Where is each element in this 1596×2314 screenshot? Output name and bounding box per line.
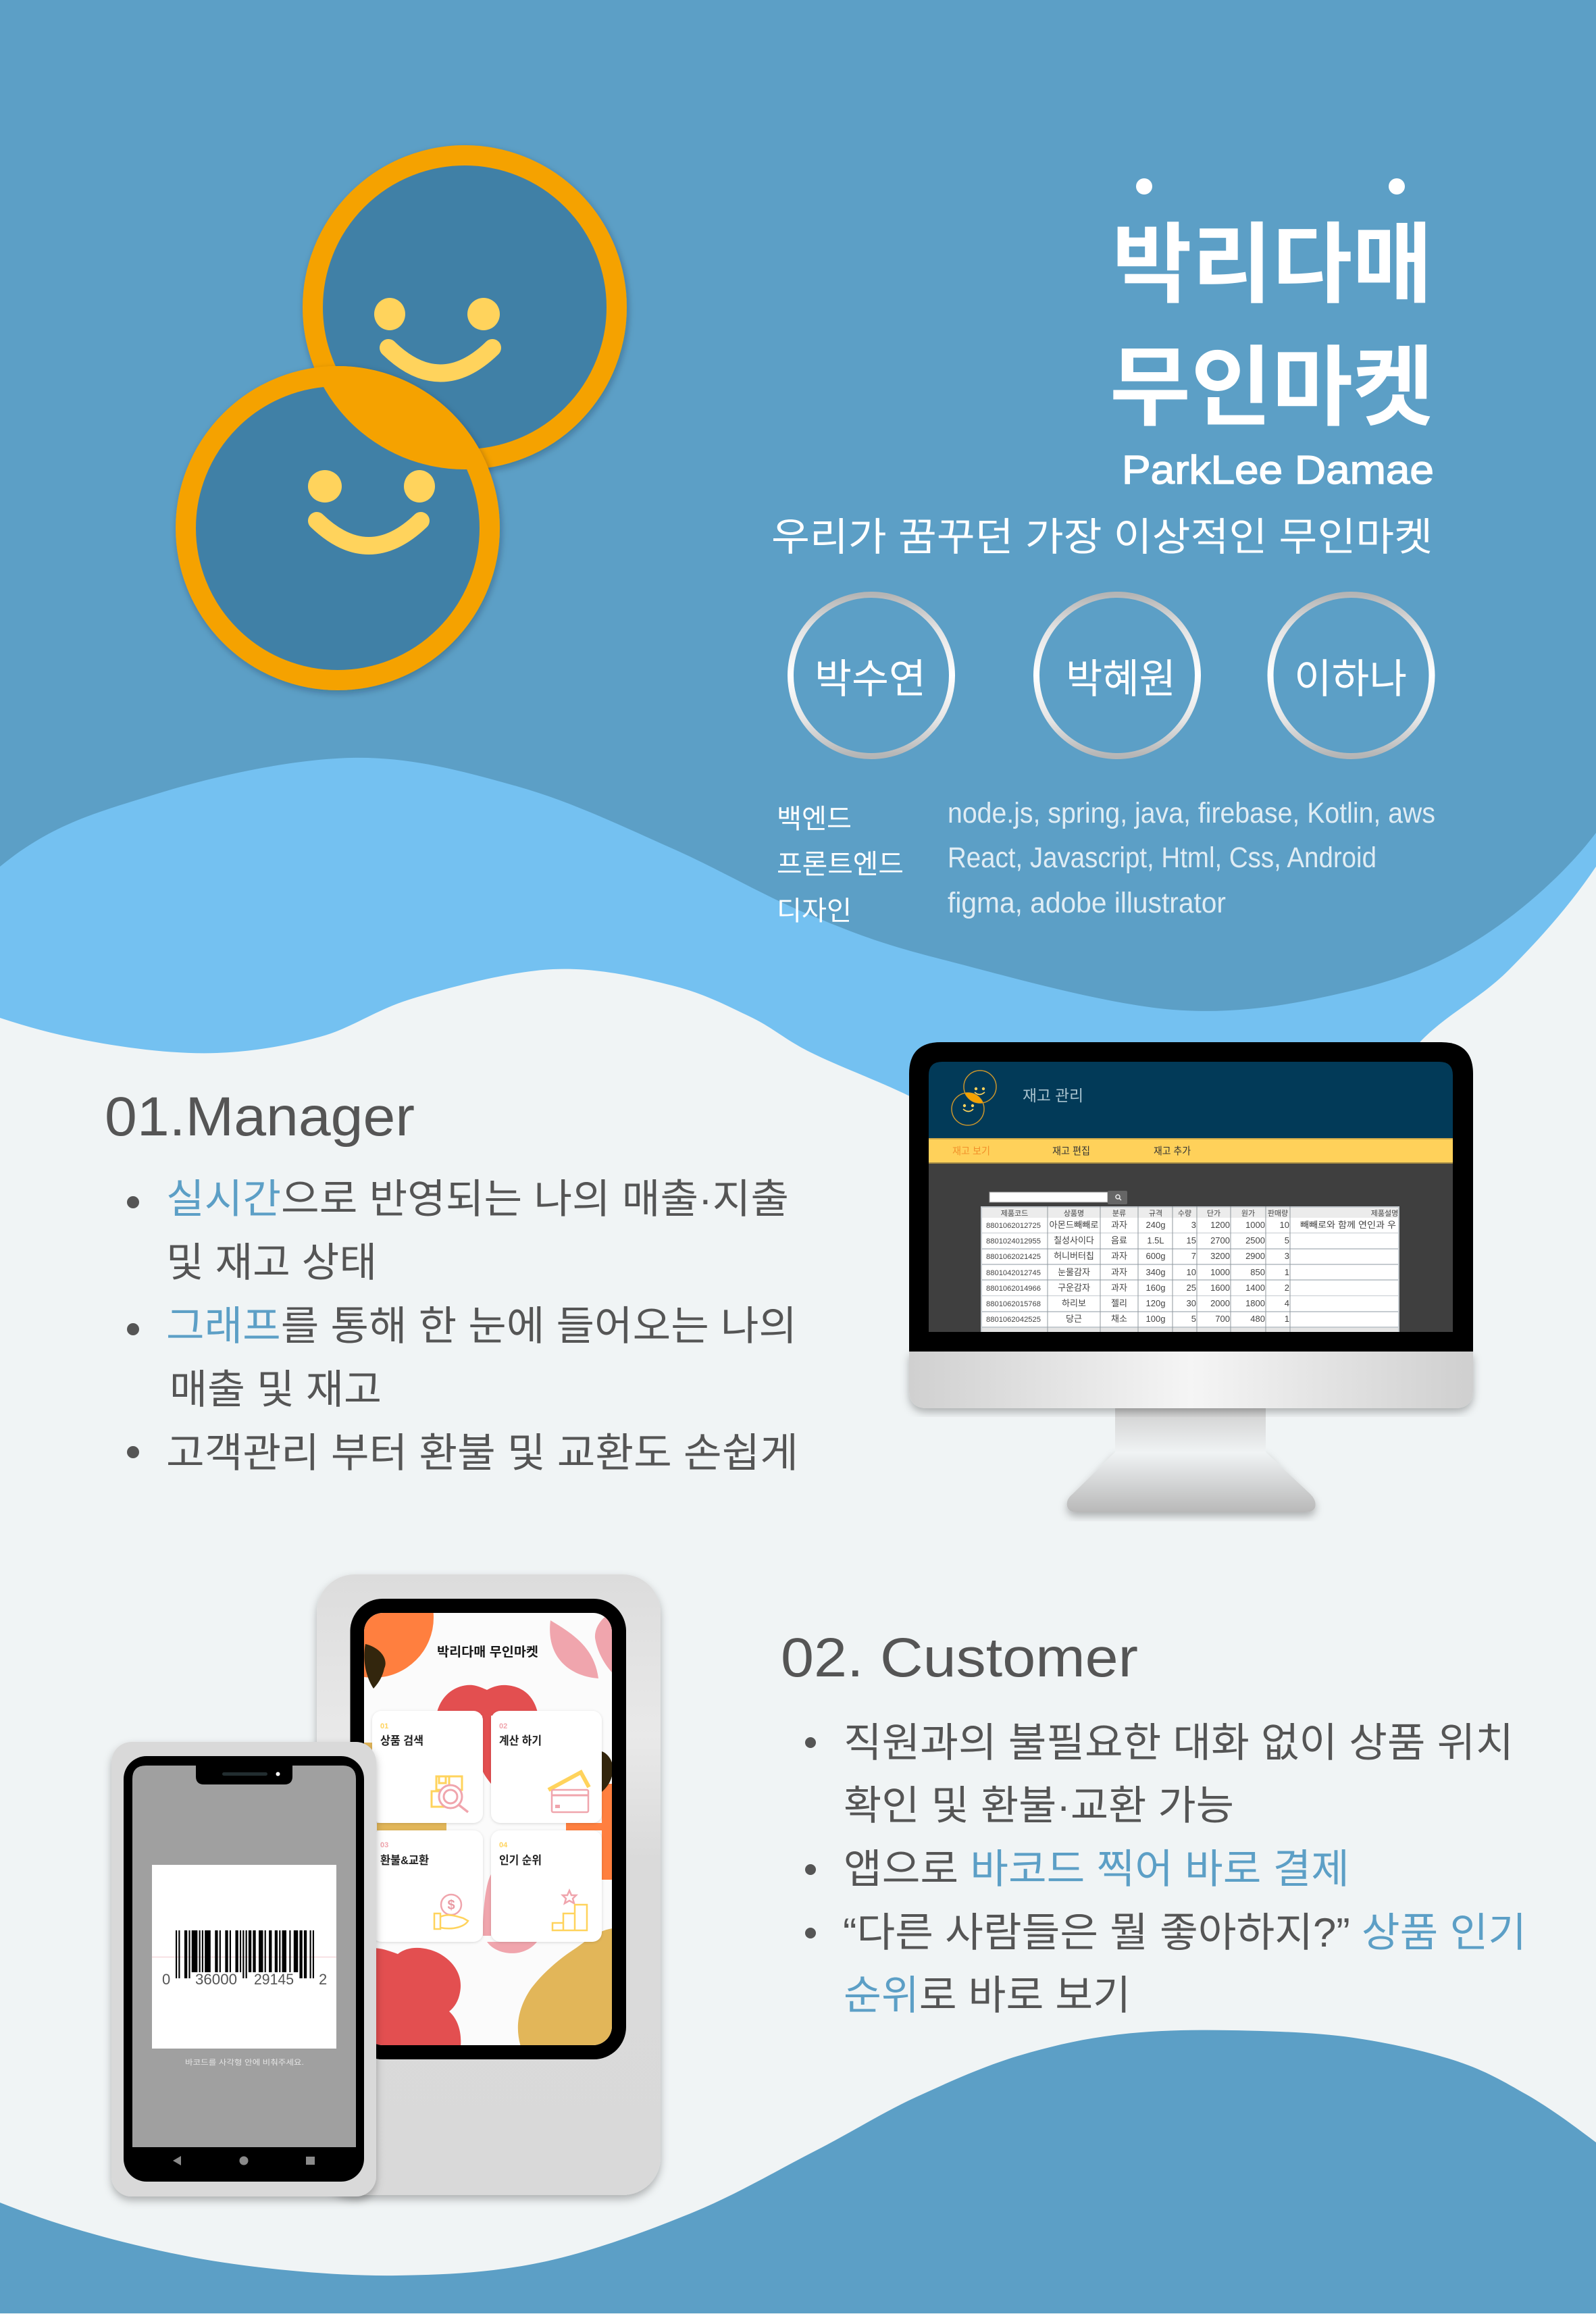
screen decoration: yellow bottom blob (518, 1928, 613, 2047)
screen: inventory table: 8801062015768 (986, 1300, 1041, 1308)
screen: inventory table: 700 (1215, 1314, 1230, 1324)
title: 박리다매 무인마켓 (1110, 178, 1434, 437)
screen: inventory table: 160g (1146, 1283, 1165, 1293)
screen: inventory table: 2 (1285, 1283, 1289, 1293)
monitor: screen inventory app (929, 1062, 1453, 1332)
screen: inventory table: 과자 (1111, 1283, 1127, 1293)
card: 계산 하기: 02 (499, 1722, 507, 1730)
screen: inventory table: 8801062012725 (986, 1222, 1041, 1230)
member: 박혜원: 박혜원 (1066, 657, 1176, 702)
title: 박리다매 무인마켓: 박리다매 (1112, 215, 1433, 314)
card: 상품 검색 (372, 1711, 483, 1823)
logo: orange overlap lens (324, 366, 479, 469)
screen: body (929, 1164, 1453, 1332)
screen: yellow nav bar: 재고 편집 (1052, 1146, 1090, 1157)
monitor mockup (909, 1042, 1473, 1512)
logo: lower smiley (186, 376, 490, 680)
screen: inventory table: 8801024012955 (986, 1237, 1041, 1245)
phone mockup: barcode scanner (111, 1742, 376, 2196)
customer bullet list: “다른 사람들은 뭘 좋아하지?” 상품 인기 (843, 1910, 1526, 1955)
manager bullet list: 고객관리 부터 환불 및 교환도 손쉽게 (166, 1431, 798, 1476)
monitor: stand neck (1115, 1408, 1266, 1453)
barcode digits: 36000 (195, 1971, 237, 1988)
customer bullet list: 순위로 바로 보기 (844, 1973, 1131, 2018)
screen: inventory table: 3 (1191, 1220, 1196, 1230)
heading: 02. Customer: 02. Customer (781, 1627, 1138, 1689)
role labels: 프론트엔드 (777, 850, 904, 879)
screen: inventory table: 1600 (1210, 1283, 1230, 1293)
tablet: body (317, 1574, 661, 2195)
customer bullet list: 앱으로 바코드 찍어 바로 결제 (844, 1847, 1349, 1892)
phone: barcode card (152, 1865, 336, 2049)
screen: app title: 박리다매 무인마켓 (437, 1645, 538, 1660)
screen decoration: red bottom blob (371, 1948, 461, 2047)
screen: title: 재고 관리 (1023, 1087, 1083, 1104)
screen: inventory table: 단가 (1207, 1209, 1220, 1218)
manager bullet list: 실시간으로 반영되는 나의 매출·지출 (166, 1177, 789, 1222)
role labels: 백엔드 (777, 804, 852, 834)
screen: inventory table: 규격 (1149, 1209, 1162, 1218)
screen: inventory table: 10 (1187, 1267, 1196, 1277)
tablet mockup: kiosk app (313, 1558, 661, 2195)
screen: inventory table: 8801062014966 (986, 1285, 1041, 1293)
monitor: stand base (1067, 1452, 1316, 1512)
card: 인기 순위: 04 (499, 1841, 508, 1849)
phone: navigation buttons (173, 2156, 315, 2165)
card: 인기 순위: 인기 순위 (499, 1854, 542, 1867)
role labels (777, 804, 904, 926)
card: 인기 순위 (491, 1830, 602, 1942)
tech stack text: node.js, spring, java, firebase, Kotlin, aws (948, 797, 1435, 829)
screen: inventory table: 1 (1285, 1314, 1289, 1324)
screen: inventory table: 눈물감자 (1058, 1267, 1090, 1277)
screen: inventory table: 850 (1250, 1267, 1265, 1277)
screen: search box (989, 1191, 1127, 1204)
screen: inventory table: 7 (1191, 1251, 1196, 1261)
screen: inventory table: 4 (1285, 1298, 1289, 1308)
screen: navy header (929, 1062, 1453, 1138)
screen: inventory table: 채소 (1111, 1314, 1127, 1324)
phone: instruction caption: 바코드를 사각형 안에 비춰주세요. (185, 2058, 304, 2067)
screen: inventory table: 구운감자 (1058, 1283, 1090, 1293)
screen: inventory table: 2000 (1210, 1298, 1230, 1308)
screen: mini logo (952, 1071, 996, 1125)
monitor: bezel (909, 1042, 1473, 1352)
screen: inventory table: 3200 (1210, 1251, 1230, 1261)
card: 계산 하기: 계산 하기 (499, 1734, 542, 1747)
customer bullet list: 직원과의 불필요한 대화 없이 상품 위치 (844, 1720, 1514, 1766)
screen: inventory table: 120g (1146, 1298, 1165, 1308)
screen: inventory table: 분류 (1112, 1209, 1126, 1218)
tablet: screen (364, 1613, 612, 2045)
screen: inventory table: 15 (1187, 1235, 1196, 1245)
barcode bars (176, 1930, 314, 1978)
screen: inventory table: 제품코드 (1001, 1209, 1028, 1218)
screen: inventory table: 10 (1280, 1220, 1289, 1230)
screen: inventory table: 3 (1285, 1251, 1289, 1261)
card: 환불&교환: 03 (380, 1841, 388, 1849)
screen: inventory table: 상품명 (1064, 1209, 1084, 1218)
screen decoration: orange blob (364, 1613, 434, 1678)
screen: inventory table: 수량 (1178, 1209, 1191, 1218)
barcode digits (162, 1971, 327, 1988)
tablet: bezel (350, 1599, 626, 2059)
heading: 01.Manager: 01.Manager (105, 1086, 415, 1148)
screen: inventory table: 칠성사이다 (1054, 1235, 1094, 1245)
manager bullet list: 그래프를 통해 한 눈에 들어오는 나의 (166, 1304, 797, 1349)
screen: inventory table: 8801062021425 (986, 1253, 1041, 1261)
screen: inventory table: 5 (1285, 1235, 1289, 1245)
background wave: light grey body (0, 867, 1596, 2314)
screen: inventory table: 음료 (1111, 1235, 1127, 1245)
screen: yellow nav bar (929, 1138, 1453, 1164)
card: 계산 하기 (491, 1711, 602, 1823)
title: 박리다매 무인마켓: 무인마켓 (1110, 338, 1434, 437)
screen: inventory table: 240g (1146, 1220, 1165, 1230)
barcode digits: 2 (319, 1971, 327, 1988)
screen decoration: red heart (437, 1685, 538, 1784)
screen: inventory table: 1000 (1210, 1267, 1230, 1277)
tech stack text: figma, adobe illustrator (948, 887, 1226, 919)
barcode digits: 29145 (254, 1971, 294, 1988)
screen: inventory table: 과자 (1111, 1267, 1127, 1277)
manager bullet list: 및 재고 상태 (166, 1240, 377, 1285)
subtitle: ParkLee Damae: ParkLee Damae (1122, 448, 1434, 492)
screen: inventory table: 5 (1191, 1314, 1196, 1324)
screen: inventory table: 하리보 (1062, 1298, 1086, 1308)
card: 환불&교환: $ (447, 1898, 455, 1913)
screen: inventory table: 1800 (1245, 1298, 1265, 1308)
screen: inventory table: 100g (1146, 1314, 1165, 1324)
logo: upper smiley (313, 155, 617, 459)
screen: inventory table: 25 (1187, 1283, 1196, 1293)
screen: inventory table: 1000 (1245, 1220, 1265, 1230)
screen: inventory table: 판매량 (1268, 1209, 1288, 1218)
barcode digits: 0 (162, 1971, 170, 1988)
phone: body (111, 1742, 376, 2196)
screen: inventory table: 1400 (1245, 1283, 1265, 1293)
screen: inventory table: 당근 (1066, 1314, 1082, 1324)
card: 상품 검색: 상품 검색 (380, 1734, 423, 1747)
team member circles (790, 594, 1432, 756)
customer bullet list (805, 1720, 1526, 2018)
background wave: bottom blue (0, 2030, 1596, 2313)
screen: inventory table: 1 (1285, 1267, 1289, 1277)
screen: inventory table: 2500 (1245, 1235, 1265, 1245)
screen: inventory table: 제품설명 (1371, 1209, 1398, 1218)
screen: inventory table: 600g (1146, 1251, 1165, 1261)
screen: inventory table: 빼빼로와 함께 연인과 우 (1300, 1220, 1396, 1230)
phone: bezel (124, 1756, 364, 2182)
screen: inventory table: 1.5L (1147, 1235, 1164, 1245)
screen: inventory table: 원가 (1241, 1209, 1255, 1218)
card: 상품 검색: 01 (380, 1722, 388, 1730)
card: 환불&교환 (372, 1830, 483, 1942)
member: 이하나: 이하나 (1294, 657, 1407, 702)
screen: inventory table: 과자 (1111, 1220, 1127, 1230)
screen: inventory table: 2900 (1245, 1251, 1265, 1261)
screen decoration: yellow and orange accents (364, 1743, 446, 1830)
screen decoration: dark leaf (364, 1644, 386, 1689)
monitor: chin (909, 1352, 1473, 1408)
role labels: 디자인 (777, 896, 852, 926)
card: 환불&교환: 환불&교환 (380, 1854, 429, 1867)
screen: inventory table: 2700 (1210, 1235, 1230, 1245)
screen: yellow nav bar: 재고 추가 (1154, 1146, 1191, 1157)
screen: inventory table: 30 (1187, 1298, 1196, 1308)
screen: inventory table: 340g (1146, 1267, 1165, 1277)
member: 박수연: 박수연 (815, 657, 926, 702)
screen: inventory table (981, 1206, 1399, 1332)
member: 박수연 (790, 594, 952, 756)
manager bullet list: 매출 및 재고 (170, 1367, 382, 1412)
phone: screen (132, 1766, 356, 2147)
screen: yellow nav bar: 재고 보기 (952, 1146, 990, 1157)
screen: inventory table: 과자 (1111, 1251, 1127, 1261)
manager bullet list (127, 1177, 798, 1476)
tech stack text: React, Javascript, Html, Css, Android (948, 842, 1376, 874)
member: 이하나 (1270, 594, 1432, 756)
screen: inventory table: 허니버터칩 (1054, 1251, 1094, 1261)
screen: inventory table: 아몬드빼빼로 (1050, 1220, 1099, 1230)
background wave: light blue (0, 758, 1596, 1148)
screen: inventory table: 1200 (1210, 1220, 1230, 1230)
screen: inventory table: 젤리 (1111, 1298, 1127, 1308)
phone: notch (196, 1766, 292, 1784)
screen: inventory table: 480 (1250, 1314, 1265, 1324)
customer bullet list: 확인 및 환불·교환 가능 (844, 1783, 1234, 1828)
logo: two overlapping smiley circles (186, 145, 627, 680)
screen: inventory table: 8801042012745 (986, 1269, 1041, 1277)
screen decoration: pink leaves (550, 1611, 613, 1678)
tagline: 우리가 꿈꾸던 가장 이상적인 무인마켓 (771, 515, 1433, 559)
screen: inventory table: 8801062042525 (986, 1316, 1041, 1324)
tech stack text (948, 797, 1435, 919)
member: 박혜원 (1036, 594, 1198, 756)
